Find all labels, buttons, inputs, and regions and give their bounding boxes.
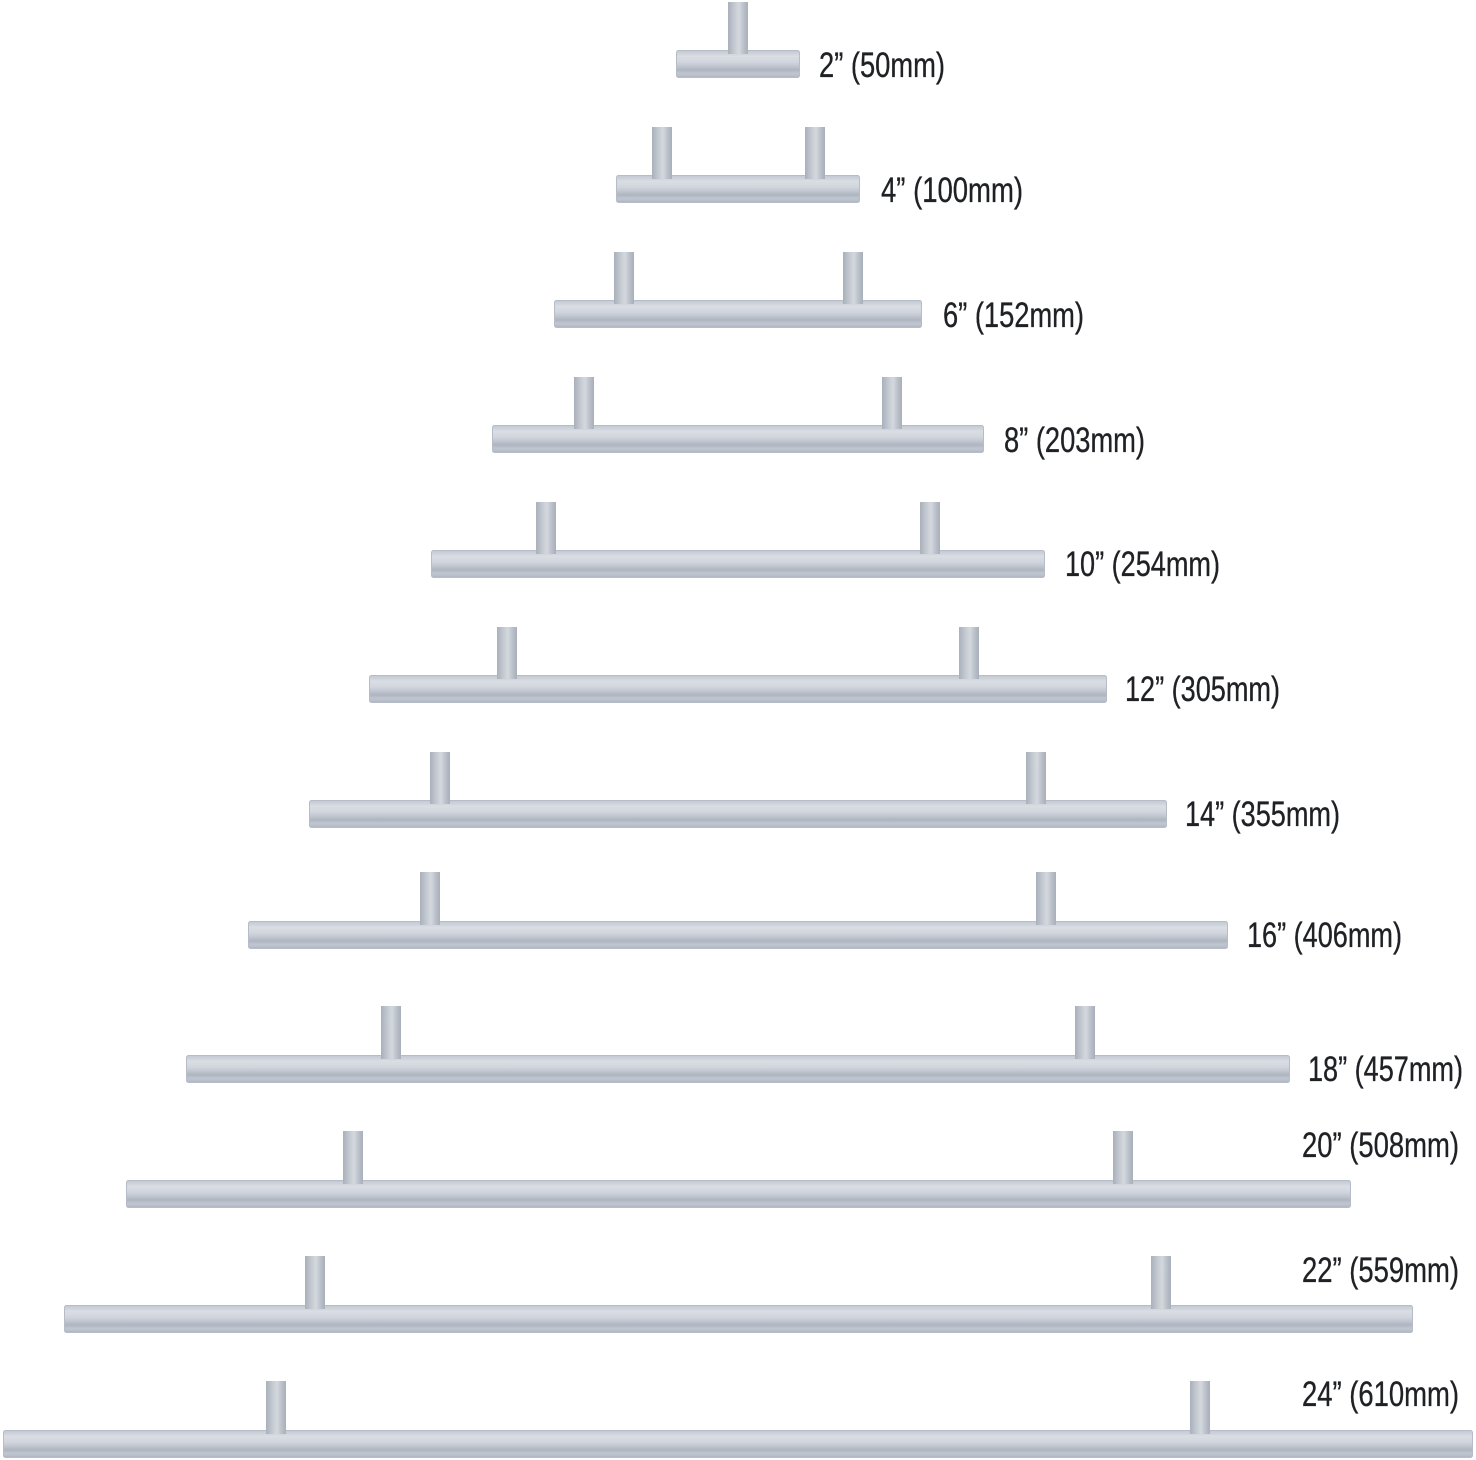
handle: 24 inch [4, 1381, 1472, 1458]
handle: 2 inch [676, 2, 800, 78]
label: 2 inch: 2” (50mm) [819, 46, 945, 85]
label: 8 inch: 8” (203mm) [1004, 421, 1145, 460]
handle: 10 inch [432, 502, 1044, 578]
label: 6 inch: 6” (152mm) [943, 296, 1084, 335]
handle: 6 inch [554, 252, 922, 328]
label: 10 inch: 10” (254mm) [1065, 545, 1220, 584]
handle: 18 inch [186, 1006, 1290, 1082]
handle: 16 inch [248, 872, 1228, 948]
handle: 12 inch [370, 627, 1106, 702]
handle: 8 inch [492, 377, 984, 452]
handle: 20 inch [126, 1131, 1350, 1208]
label: 12 inch: 12” (305mm) [1125, 670, 1280, 709]
label: 16 inch: 16” (406mm) [1247, 916, 1402, 955]
handle: 4 inch [616, 127, 860, 202]
handle: 14 inch [310, 752, 1166, 828]
handle: 22 inch [64, 1256, 1412, 1332]
label: 4 inch: 4” (100mm) [881, 171, 1023, 210]
label: 14 inch: 14” (355mm) [1185, 795, 1340, 834]
